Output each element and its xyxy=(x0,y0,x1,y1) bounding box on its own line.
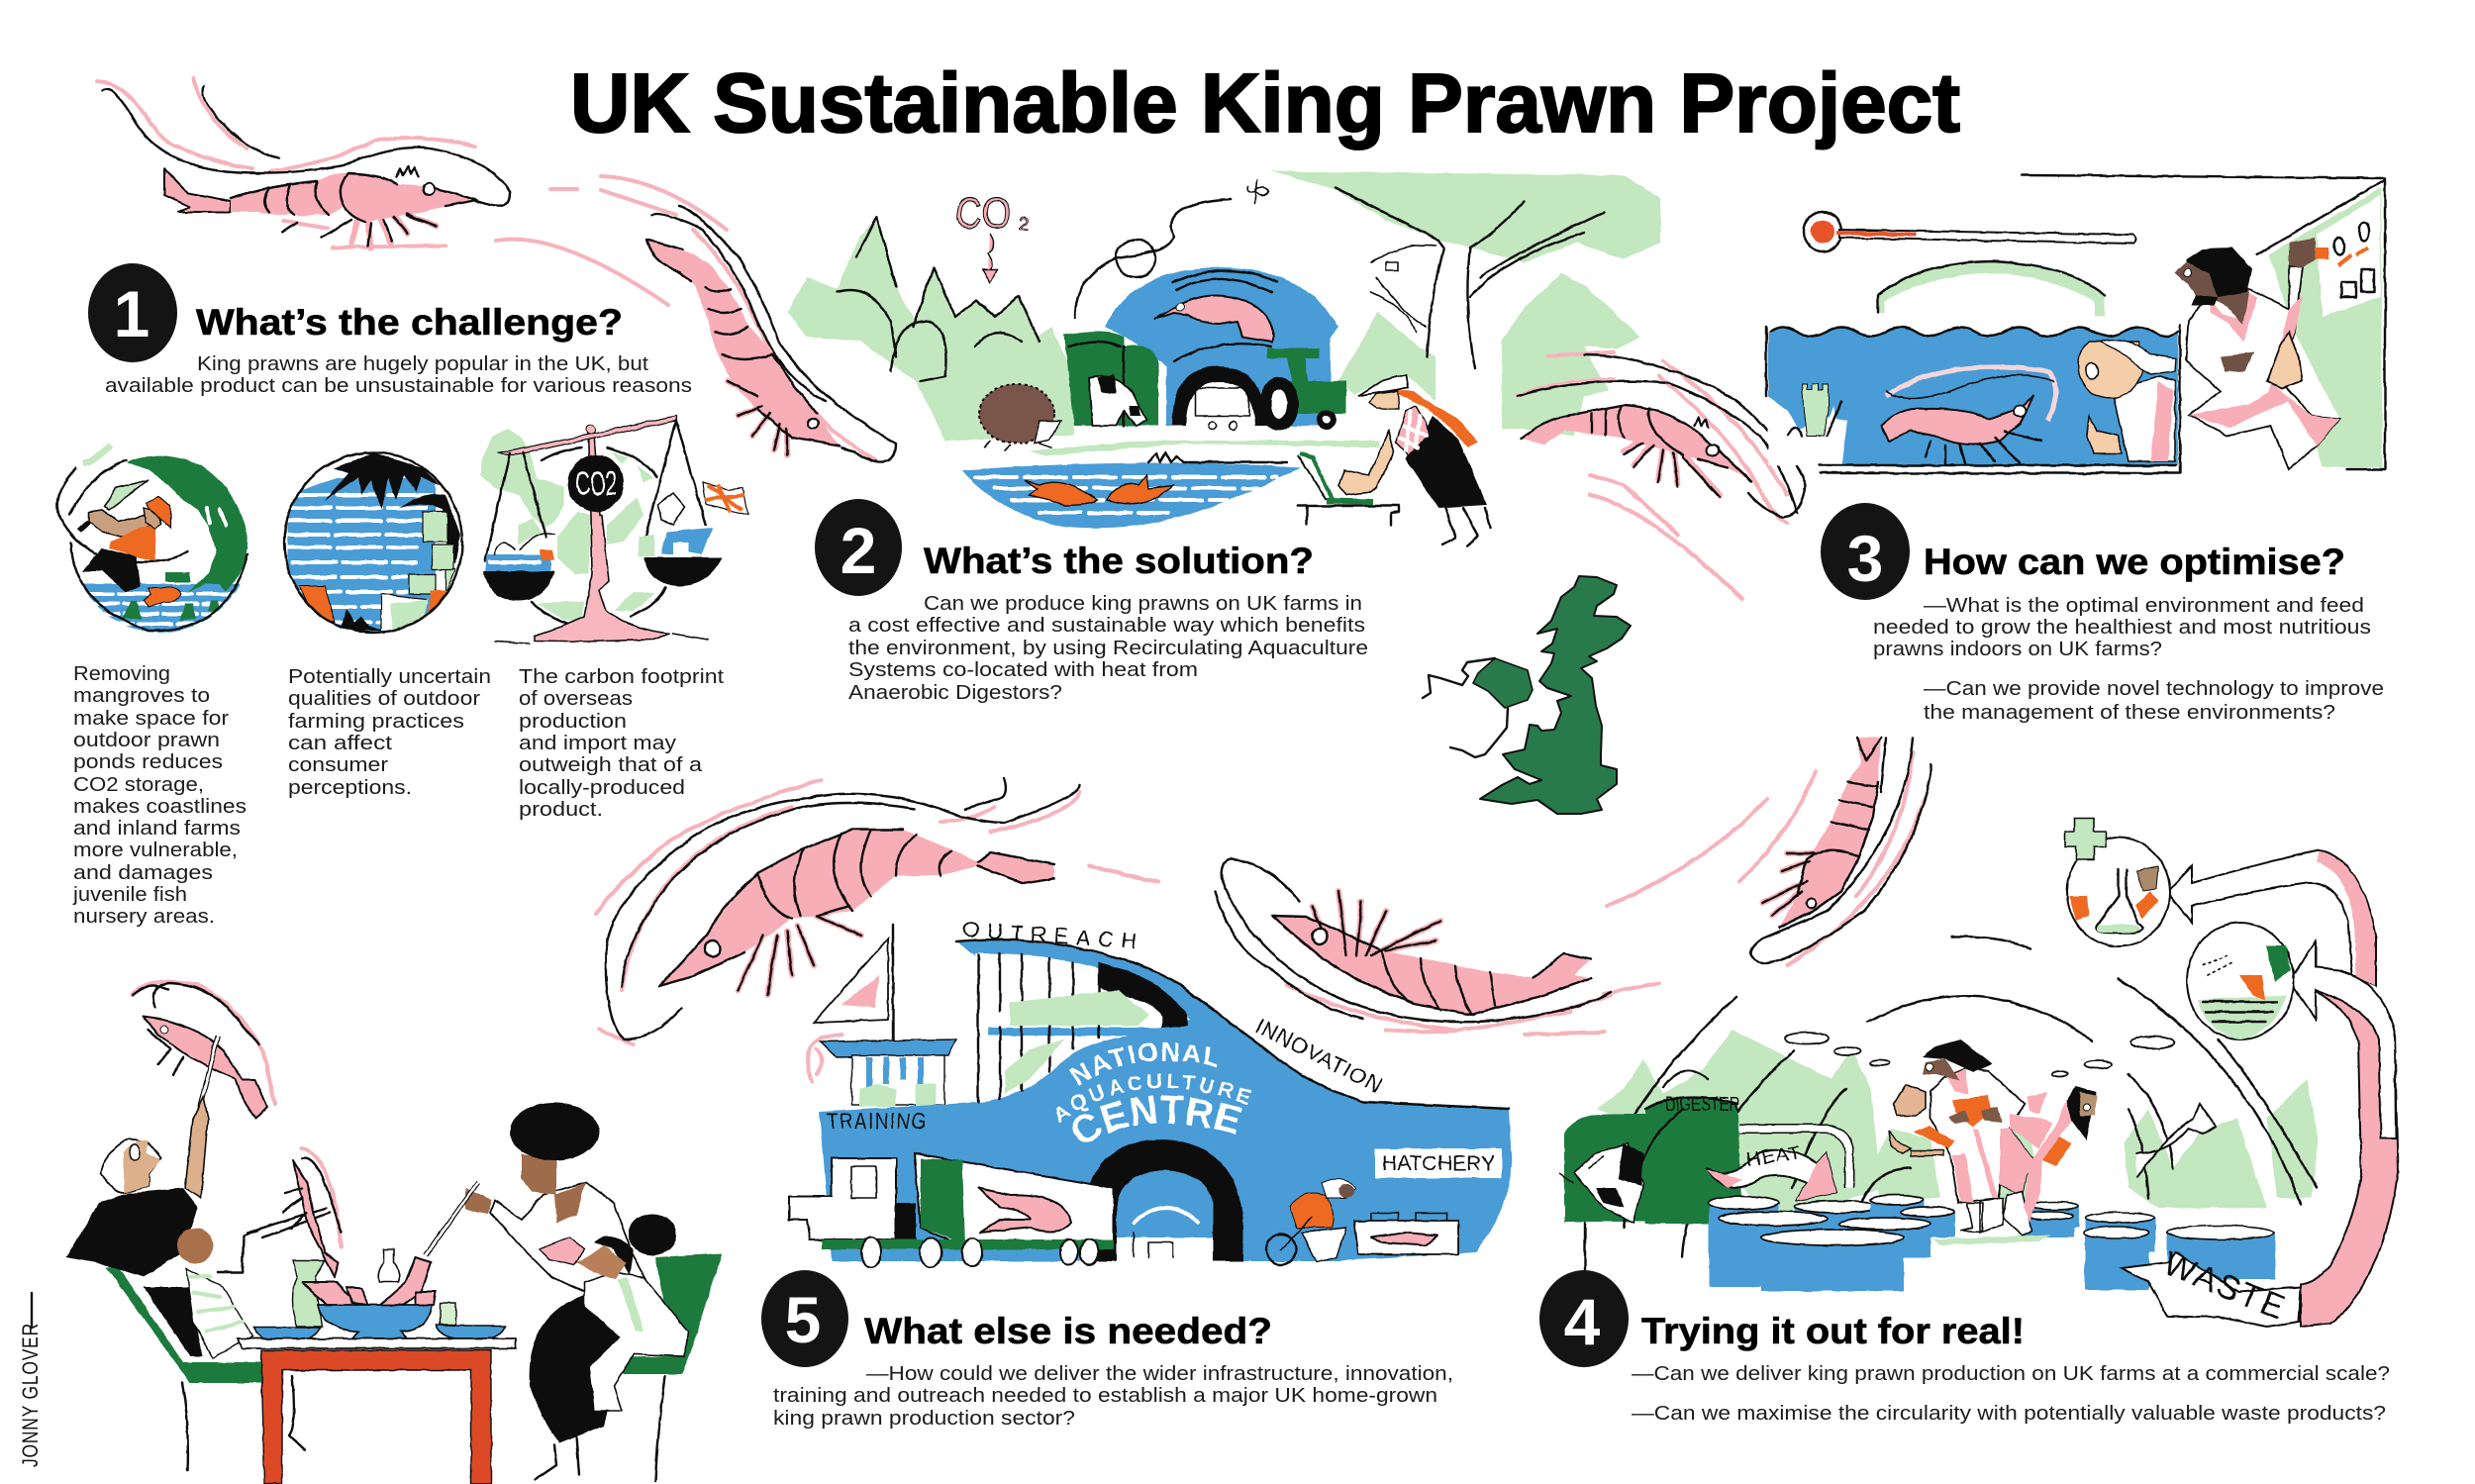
outline swing arc xyxy=(57,460,248,631)
prawn: large centre left xyxy=(596,778,1079,1044)
panel: farm trial dome xyxy=(1559,819,2398,1328)
section 4 text xyxy=(1632,1363,2390,1425)
text: carbon footprint: outweigh that of a xyxy=(519,754,703,776)
artist signature: JONNY GLOVER xyxy=(18,1323,43,1467)
face xyxy=(2175,262,2218,297)
hair xyxy=(2186,247,2252,305)
text: farming practices: Potentially uncertain xyxy=(288,666,491,688)
second scientist xyxy=(2025,1101,2072,1223)
outreach label: OUTREACH xyxy=(962,917,1139,953)
CO2 label and arrow: CO xyxy=(955,189,1011,238)
stacked boxes xyxy=(409,512,455,594)
panel: mangrove illustration xyxy=(57,445,257,639)
tank prawn xyxy=(1881,367,2056,463)
pink coat linings xyxy=(1947,1068,2052,1202)
section 4 text: —Can we maximise the circularity with potentially valuable waste products? xyxy=(1632,1403,2386,1425)
text: farming practices: farming practices xyxy=(288,711,464,733)
digesters xyxy=(1564,1071,1742,1228)
thermometer xyxy=(1804,212,2136,251)
CO2 label and arrow xyxy=(955,189,1029,283)
water xyxy=(81,583,241,633)
fish xyxy=(144,587,181,607)
text: carbon footprint xyxy=(519,666,725,821)
dome over tank xyxy=(1878,261,2105,317)
text: carbon footprint: production xyxy=(519,711,627,733)
flask circle icon xyxy=(2067,838,2170,946)
section 2 badge: 2 xyxy=(841,514,876,587)
section 1 intro text: King prawns are hugely popular in the UK, but xyxy=(197,353,648,375)
text: carbon footprint: locally-produced xyxy=(519,777,685,799)
beam xyxy=(498,416,676,455)
section 5 text: king prawn production sector? xyxy=(773,1408,1075,1430)
hat xyxy=(1358,374,1408,396)
section 5 text xyxy=(773,1363,1453,1430)
building name: NATIONAL xyxy=(1069,1041,1218,1086)
building name: AQUACULTURE xyxy=(1056,1073,1251,1123)
section 4 badge: 4 xyxy=(1564,1285,1601,1358)
heat arrow: HEAT xyxy=(1745,1141,1803,1171)
pond water xyxy=(287,478,436,634)
text: mangroves: more vulnerable, xyxy=(73,840,238,861)
section 3 badge: 3 xyxy=(1847,522,1883,595)
castle xyxy=(1802,384,1829,436)
text: carbon footprint: and import may xyxy=(519,733,676,754)
training label: TRAINING xyxy=(827,1109,928,1134)
silos xyxy=(1064,331,1158,426)
waste loop arrow lower xyxy=(2289,941,2398,1327)
left trees xyxy=(788,217,1074,441)
section 3 text: prawns indoors on UK farms? xyxy=(1873,639,2162,660)
left tanks xyxy=(1708,1195,1955,1291)
prawn: top left xyxy=(97,77,510,247)
heat arrow xyxy=(1707,1141,1836,1200)
pale trees xyxy=(1597,1030,1881,1224)
building name xyxy=(1056,1041,1251,1142)
wall with controls xyxy=(2022,175,2385,469)
dragonfly xyxy=(1247,180,1269,203)
man clipboard and sleeve xyxy=(1914,1126,1955,1148)
right tanks xyxy=(2025,1202,2275,1290)
left pan xyxy=(483,534,554,601)
hands xyxy=(1948,1107,2002,1124)
text: mangroves: and damages xyxy=(73,862,213,884)
section 2 heading: What’s the solution? xyxy=(924,541,1314,581)
tablet hand xyxy=(2222,352,2255,372)
title: UK Sustainable King Prawn Project xyxy=(570,56,1960,149)
heat exit arrow xyxy=(2136,1104,2216,1178)
white can xyxy=(381,594,426,634)
food prawns xyxy=(302,1257,436,1307)
hair xyxy=(1379,389,1478,447)
section 5 heading: What else is needed? xyxy=(864,1311,1272,1351)
section 2 badge xyxy=(815,499,902,596)
girl xyxy=(540,1214,688,1411)
main building body xyxy=(820,940,1512,1261)
green cross xyxy=(2065,819,2106,859)
face xyxy=(1369,391,1399,409)
section 2 text xyxy=(848,593,1368,704)
section 3 badge xyxy=(1821,503,1910,600)
prawn: centre right xyxy=(1518,351,1806,599)
section 5 badge: 5 xyxy=(785,1283,821,1356)
cow xyxy=(1559,1143,1643,1223)
chair stand lines xyxy=(182,1376,665,1481)
woodcutter xyxy=(79,480,170,592)
small tree behind farmer xyxy=(1338,312,1436,401)
globe xyxy=(532,447,665,624)
dome lines xyxy=(1585,937,2317,1270)
text: farming practices: consumer xyxy=(288,754,388,776)
palm fronds xyxy=(324,452,460,564)
thumb hand xyxy=(2267,332,2302,388)
building name: CENTRE xyxy=(1072,1095,1242,1142)
text: farming practices: qualities of outdoor xyxy=(288,688,480,710)
hatchery sign: HATCHERY xyxy=(1382,1152,1495,1175)
text: mangroves: mangroves to xyxy=(73,685,210,707)
strings xyxy=(485,421,706,561)
mangrove canopy xyxy=(126,455,248,592)
truck prawn xyxy=(978,1188,1071,1233)
CO2 badge xyxy=(568,454,624,512)
ground patch xyxy=(1932,1235,2051,1245)
face xyxy=(1923,1059,1960,1081)
white seaweed xyxy=(1768,396,1847,465)
truck xyxy=(789,1153,1114,1267)
barn xyxy=(1105,267,1338,430)
text: farming practices: perceptions. xyxy=(288,777,412,799)
table legs xyxy=(261,1350,491,1484)
tractor xyxy=(1259,348,1346,431)
section 1 badge xyxy=(88,263,177,362)
coastline of Ireland xyxy=(1423,658,1508,757)
right lower tree xyxy=(1502,273,1640,436)
text: farming practices xyxy=(288,666,491,799)
right canopy xyxy=(1271,171,1660,262)
coat of tall scientist xyxy=(1930,1067,2037,1203)
scientist at wall xyxy=(2175,238,2339,469)
skylights xyxy=(1785,1033,2174,1077)
section 4 badge xyxy=(1539,1270,1629,1367)
owl in tree xyxy=(1371,246,1436,332)
text: mangroves: makes coastlines xyxy=(73,796,247,818)
section 3 heading: How can we optimise? xyxy=(1924,542,2345,582)
glass window xyxy=(956,940,1509,1109)
panel: National Aquaculture Centre xyxy=(788,917,1513,1268)
section 4 text: —Can we deliver king prawn production on UK farms at a commercial scale? xyxy=(1632,1363,2390,1385)
text: mangroves: ponds reduces xyxy=(73,751,223,773)
section 1 heading: What’s the challenge? xyxy=(196,302,623,343)
panel: outdoor ponds illustration xyxy=(284,452,462,634)
man head xyxy=(1894,1084,1926,1116)
waste banner: WASTE xyxy=(2158,1244,2292,1328)
big bowl xyxy=(318,1305,432,1338)
section 1 intro text: available product can be unsustainable for various reasons xyxy=(105,375,692,397)
cow xyxy=(1089,374,1146,426)
section 3 text: the management of these environments? xyxy=(1924,702,2335,724)
tongs and prawn two xyxy=(248,1148,342,1277)
section 4 heading: Trying it out for real! xyxy=(1641,1311,2025,1351)
right pan xyxy=(639,493,723,586)
text: mangroves: nursery areas. xyxy=(73,906,215,928)
arm xyxy=(1338,431,1394,495)
section 1 intro text xyxy=(105,353,692,397)
barn prawn xyxy=(1154,271,1277,342)
bottle xyxy=(378,1249,400,1282)
section 2 text: Anaerobic Digestors? xyxy=(848,682,1062,704)
section 5 text: —How could we deliver the wider infrastructure, innovation, xyxy=(866,1363,1453,1385)
scientist in tank xyxy=(2078,340,2176,461)
outline xyxy=(284,452,462,633)
stand xyxy=(535,434,670,642)
text: carbon footprint: of overseas xyxy=(519,688,633,710)
Great Britain xyxy=(1480,576,1631,814)
section 3 text: needed to grow the healthiest and most nutritious xyxy=(1873,617,2371,639)
section 3 text: —What is the optimal environment and feed xyxy=(1924,595,2364,617)
woman xyxy=(426,1103,655,1480)
prawn: right of centre xyxy=(1089,859,1611,1032)
sail xyxy=(814,925,893,1041)
innovation label: INNOVATION xyxy=(1251,1013,1388,1099)
man xyxy=(66,1097,208,1356)
farmer xyxy=(1338,374,1490,546)
laptop and table xyxy=(1298,453,1399,525)
pink pennant xyxy=(808,1035,842,1082)
clipboard xyxy=(1952,1095,1992,1127)
CO2 label and arrow: 2 xyxy=(1019,214,1029,234)
panel: farm scene xyxy=(788,171,1660,546)
prawn in air xyxy=(132,982,275,1134)
ground strip xyxy=(1030,441,1379,455)
panel: family dinner xyxy=(66,982,722,1484)
raised hand xyxy=(2027,1092,2047,1114)
coat xyxy=(2186,266,2339,469)
text: mangroves: CO2 storage, xyxy=(73,774,204,796)
hatchery sign xyxy=(1375,1148,1502,1178)
prawn: upper right of section 4 xyxy=(1525,738,1930,1035)
legs xyxy=(1442,508,1490,546)
fertiliser circle icon xyxy=(2187,923,2294,1039)
prawn: diving right of section 1 xyxy=(646,206,896,462)
text: mangroves: Removing xyxy=(73,663,170,685)
pink linings xyxy=(2189,293,2339,445)
vine xyxy=(83,445,111,463)
waste loop arrow upper xyxy=(2167,850,2376,986)
text: mangroves: make space for xyxy=(73,708,229,730)
section 3 text xyxy=(1873,595,2384,724)
cyclist xyxy=(1266,1179,1356,1264)
chairs left xyxy=(106,1267,261,1383)
bottom frond xyxy=(341,609,380,631)
flight path xyxy=(1075,199,1231,319)
speed lines: after first prawn xyxy=(496,176,727,305)
jug xyxy=(292,1260,325,1327)
pipe xyxy=(1739,1129,1849,1188)
text: mangroves: juvenile fish xyxy=(72,884,187,906)
text: mangroves: and inland farms xyxy=(73,818,241,840)
shirt xyxy=(1396,406,1429,455)
section 2 text: Can we produce king prawns on UK farms in xyxy=(924,593,1362,615)
hedgehog xyxy=(979,384,1061,450)
table top xyxy=(239,1338,516,1348)
section 2 text: a cost effective and sustainable way which benefits xyxy=(848,615,1365,637)
training tower xyxy=(821,1039,956,1107)
text: carbon footprint: The carbon footprint xyxy=(519,666,725,688)
boots xyxy=(1960,1191,2031,1236)
text: carbon footprint: product. xyxy=(519,799,603,821)
orange cup xyxy=(299,586,335,622)
tree trunks xyxy=(1336,188,1604,368)
small bowls xyxy=(253,1326,505,1341)
overalls xyxy=(1406,416,1487,508)
UK flag xyxy=(703,482,747,515)
section 5 badge xyxy=(761,1270,848,1367)
right chair xyxy=(621,1253,722,1374)
panel: tank and scientists xyxy=(1766,175,2385,473)
glass xyxy=(441,1303,455,1325)
panel: carbon scales illustration xyxy=(480,416,747,643)
section 5 text: training and outreach needed to establish a major UK home-grown xyxy=(773,1385,1437,1407)
child xyxy=(177,1228,257,1358)
text: farming practices: can affect xyxy=(288,733,393,754)
tank water xyxy=(1768,329,2178,465)
hair xyxy=(1923,1039,1992,1072)
section 3 text: —Can we provide novel technology to improve xyxy=(1924,678,2384,700)
raised hand xyxy=(2289,238,2317,267)
pond xyxy=(962,452,1301,528)
CO2 badge: CO2 xyxy=(575,465,617,503)
section 1 badge: 1 xyxy=(114,277,149,350)
cart of prawns xyxy=(1354,1213,1458,1254)
UK and Ireland map xyxy=(1423,576,1631,814)
fish xyxy=(1025,480,1097,505)
text: mangroves xyxy=(72,663,247,928)
tree on scale xyxy=(480,429,564,544)
chest xyxy=(2209,289,2249,325)
section 2 text: the environment, by using Recirculating Aquaculture xyxy=(848,638,1368,659)
tank frame xyxy=(1766,325,2180,473)
team of scientists xyxy=(1889,1039,2097,1236)
digesters: DIGESTER xyxy=(1665,1094,1739,1116)
text: mangroves: outdoor prawn xyxy=(73,730,220,751)
Northern Ireland xyxy=(1473,658,1533,708)
section 2 text: Systems co-located with heat from xyxy=(848,659,1198,681)
arch xyxy=(1086,1139,1243,1261)
